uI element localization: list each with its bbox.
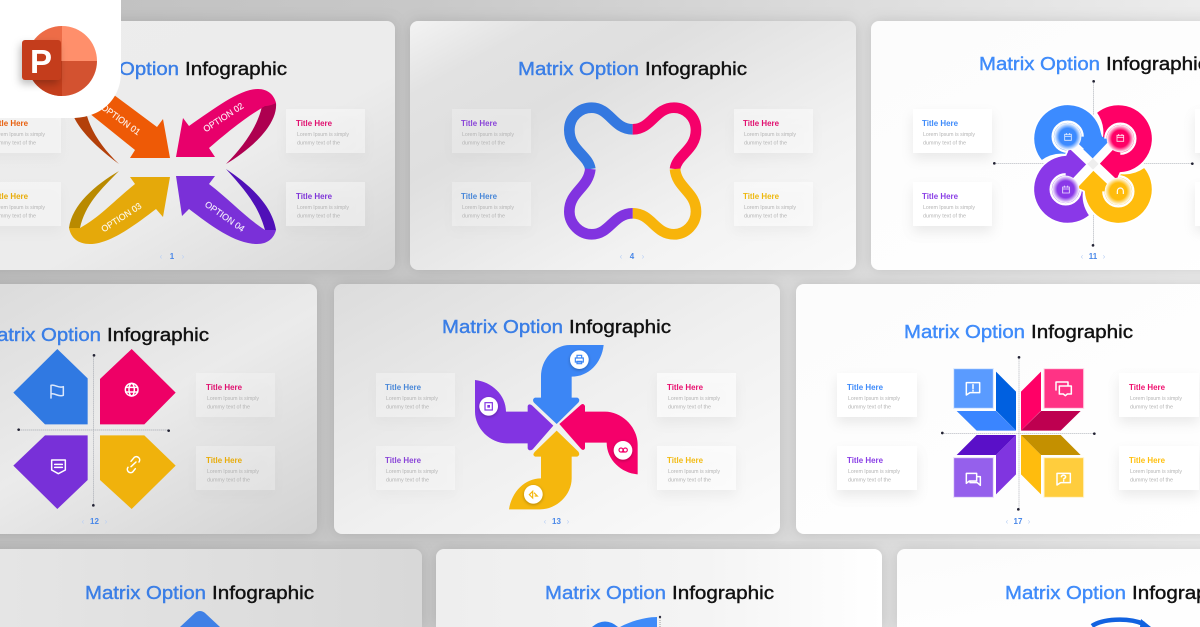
title <box>518 59 747 79</box>
text card: blue: dummy text of the <box>923 140 966 146</box>
arrow: gold <box>509 431 579 509</box>
icon hub: purple calendar <box>1051 174 1081 204</box>
page number: ‹ <box>1006 517 1009 526</box>
page number: › <box>182 252 185 261</box>
text card: pink: dummy text of the <box>297 140 340 146</box>
page number <box>160 252 185 261</box>
text card: blue: Lorem Ipsum is simply <box>923 132 975 138</box>
panel: slide 12 pentagons <box>0 284 317 534</box>
text card: gold: Lorem Ipsum is simply <box>207 469 259 475</box>
title: Infographic <box>672 583 774 603</box>
arrow: option 01 <box>73 92 170 164</box>
center diamond <box>1087 158 1099 170</box>
arrow: option 04 <box>176 169 276 244</box>
text card: blue <box>376 373 455 417</box>
text card: gold: Title Here <box>667 456 704 465</box>
text card: pink: Title Here <box>206 383 243 392</box>
page number: 12 <box>90 517 99 526</box>
box: gold <box>1021 435 1084 497</box>
text card: gold <box>196 446 275 490</box>
icon: PowerPoint logo: P <box>30 43 52 80</box>
page number <box>1081 252 1106 261</box>
text card: pink: Title Here <box>667 383 704 392</box>
text card: purple: Lorem Ipsum is simply <box>386 469 438 475</box>
pentagon: purple badge <box>13 435 88 509</box>
diagram: pentagons <box>13 349 176 509</box>
title: Matrix Option <box>904 322 1025 342</box>
title: Matrix Option <box>58 59 179 79</box>
box: blue <box>954 369 1016 431</box>
text card: blue: Title Here <box>385 383 422 392</box>
arrow: option 04: OPTION 04 <box>203 199 246 234</box>
page number <box>544 517 570 526</box>
text card: gold: Lorem Ipsum is simply <box>744 205 796 211</box>
text card: pink: Lorem Ipsum is simply <box>668 396 720 402</box>
text card: gold: dummy text of the <box>668 478 711 484</box>
arrowhead: blue <box>1083 131 1110 158</box>
text card: pink <box>657 373 736 417</box>
title: Infographic <box>1031 322 1133 342</box>
text card: blue: Title Here <box>847 383 884 392</box>
arrow: option 03 <box>69 171 170 244</box>
text card: gold <box>1119 446 1199 490</box>
text card: blue: Lorem Ipsum is simply <box>848 396 900 402</box>
text card: gold <box>0 182 61 226</box>
text card: pink <box>1195 109 1200 153</box>
title: Matrix Option <box>85 583 206 603</box>
text card: purple <box>837 446 917 490</box>
page number: ‹ <box>82 517 85 526</box>
diagram: circular arrows <box>1033 104 1153 224</box>
panel: slide 13 pinwheel <box>334 284 780 534</box>
diagram: pinwheel arrows <box>475 345 638 509</box>
icon hub: gold headset <box>1103 176 1133 206</box>
text card: gold: dummy text of the <box>744 214 787 220</box>
segment: pink <box>1096 104 1153 181</box>
page number: 11 <box>1089 252 1098 261</box>
page number <box>620 252 645 261</box>
text card: blue <box>452 182 531 226</box>
page number: ‹ <box>620 252 623 261</box>
title: Matrix Option <box>518 59 639 79</box>
shape: blue segments <box>592 616 661 627</box>
text card: orange <box>0 109 61 153</box>
text card: blue: dummy text of the <box>848 404 891 410</box>
arrow: option 02: OPTION 02 <box>201 101 245 134</box>
text card: gold <box>1195 182 1200 226</box>
text card: purple <box>452 109 531 153</box>
arrow: option 01: OPTION 01 <box>99 102 142 137</box>
page number: › <box>105 517 108 526</box>
text card: purple <box>913 182 992 226</box>
panel: slide 17 isometric boxes <box>796 284 1200 534</box>
title <box>904 322 1133 342</box>
diagram: isometric boxes <box>941 356 1096 511</box>
page number: › <box>567 517 570 526</box>
text card: blue: dummy text of the <box>462 214 505 220</box>
text card: pink <box>196 373 275 417</box>
title: Infographic <box>1106 54 1200 74</box>
text card: purple: Lorem Ipsum is simply <box>297 205 349 211</box>
title <box>85 583 314 603</box>
text card: purple: Title Here <box>847 456 884 465</box>
text card: purple: Lorem Ipsum is simply <box>462 132 514 138</box>
text card: pink: dummy text of the <box>744 140 787 146</box>
icon hub: pink calendar <box>1105 124 1135 154</box>
text card: purple: Title Here <box>461 119 498 128</box>
page number: ‹ <box>544 517 547 526</box>
arrow: purple <box>475 380 553 450</box>
page number: › <box>642 252 645 261</box>
title: Infographic <box>212 583 314 603</box>
icon hub: blue calendar <box>1053 122 1083 152</box>
text card: pink <box>734 109 813 153</box>
arrow: option 02 <box>176 89 276 164</box>
text card: gold <box>734 182 813 226</box>
text card: gold: Lorem Ipsum is simply <box>1130 469 1182 475</box>
title <box>0 325 209 345</box>
page number: ‹ <box>160 252 163 261</box>
page number <box>82 517 108 526</box>
box: purple <box>954 435 1016 497</box>
chart: cross outline <box>569 108 696 234</box>
panel: slide 11 circular arrows <box>871 21 1200 270</box>
segment: gold <box>1076 167 1153 224</box>
segment: purple <box>1033 147 1090 224</box>
pentagon: gold link <box>100 435 176 509</box>
pentagon: pink globe <box>100 349 176 424</box>
text card: blue: Lorem Ipsum is simply <box>462 205 514 211</box>
title: Matrix Option <box>442 317 563 337</box>
title: Infographic <box>645 59 747 79</box>
text card: purple: dummy text of the <box>297 214 340 220</box>
title <box>979 54 1200 74</box>
text card: gold <box>657 446 736 490</box>
text card: gold: Title Here <box>1129 456 1166 465</box>
text card: pink <box>286 109 365 153</box>
shape: blue curved arrow <box>1092 619 1151 627</box>
arrow: blue <box>533 345 604 424</box>
shape: blue triangle <box>180 611 220 627</box>
text card: purple: Lorem Ipsum is simply <box>923 205 975 211</box>
text card: gold: Title Here <box>206 456 243 465</box>
text card: purple: Lorem Ipsum is simply <box>848 469 900 475</box>
text card: gold: dummy text of the <box>1130 478 1173 484</box>
panel: slide 1 arrows <box>0 21 395 270</box>
title: Infographic <box>569 317 671 337</box>
text card: pink: Lorem Ipsum is simply <box>297 132 349 138</box>
panel: slide 4 cross outline <box>410 21 856 270</box>
text card: purple: Title Here <box>296 192 333 201</box>
pentagon: blue flag <box>13 349 88 424</box>
title <box>442 317 671 337</box>
text card: purple: dummy text of the <box>848 478 891 484</box>
text card: pink: Title Here <box>743 119 780 128</box>
title <box>58 59 287 79</box>
text card: purple: dummy text of the <box>462 140 505 146</box>
page number <box>1006 517 1031 526</box>
text card: pink: Lorem Ipsum is simply <box>1130 396 1182 402</box>
text card: blue <box>913 109 992 153</box>
text card: purple: Title Here <box>922 192 959 201</box>
text card: purple: dummy text of the <box>386 478 429 484</box>
text card: gold: Lorem Ipsum is simply <box>668 469 720 475</box>
text card: pink: Lorem Ipsum is simply <box>744 132 796 138</box>
page number: ‹ <box>1081 252 1084 261</box>
panel: third row left slide <box>0 549 422 627</box>
text card: pink: dummy text of the <box>1130 404 1173 410</box>
panel: third row middle slide <box>436 549 882 627</box>
arrow: pink <box>559 404 638 474</box>
text card: blue: Title Here <box>461 192 498 201</box>
text card: blue: Title Here <box>922 119 959 128</box>
text card: pink: Title Here <box>1129 383 1166 392</box>
text card: purple <box>376 446 455 490</box>
text card: blue: Lorem Ipsum is simply <box>386 396 438 402</box>
page number: 1 <box>170 252 175 261</box>
page number: 13 <box>552 517 561 526</box>
text card: blue <box>837 373 917 417</box>
title: Matrix Option <box>1005 583 1126 603</box>
title <box>1005 583 1200 603</box>
title: Infographic <box>107 325 209 345</box>
title: Matrix Option <box>545 583 666 603</box>
text card: pink: Lorem Ipsum is simply <box>207 396 259 402</box>
segment: blue <box>1033 104 1110 161</box>
page number: › <box>1103 252 1106 261</box>
panel: PowerPoint badge <box>0 0 121 118</box>
title: Infographic <box>185 59 287 79</box>
page number: › <box>1028 517 1031 526</box>
arrow: option 03: OPTION 03 <box>99 201 143 234</box>
title <box>545 583 774 603</box>
text card: pink: Title Here <box>296 119 333 128</box>
text card: purple <box>286 182 365 226</box>
title: Matrix Option <box>979 54 1100 74</box>
text card: purple: Title Here <box>385 456 422 465</box>
text card: gold: dummy text of the <box>207 478 250 484</box>
box: pink <box>1021 369 1084 431</box>
page number: 17 <box>1014 517 1023 526</box>
text card: pink <box>1119 373 1199 417</box>
panel: third row right slide <box>897 549 1200 627</box>
page number: 4 <box>630 252 635 261</box>
axes: slide 11 dotted cross <box>993 80 1194 247</box>
text card: gold: Title Here <box>743 192 780 201</box>
text card: purple: dummy text of the <box>923 214 966 220</box>
text card: blue: dummy text of the <box>386 404 429 410</box>
text card: pink: dummy text of the <box>668 404 711 410</box>
text card: pink: dummy text of the <box>207 404 250 410</box>
